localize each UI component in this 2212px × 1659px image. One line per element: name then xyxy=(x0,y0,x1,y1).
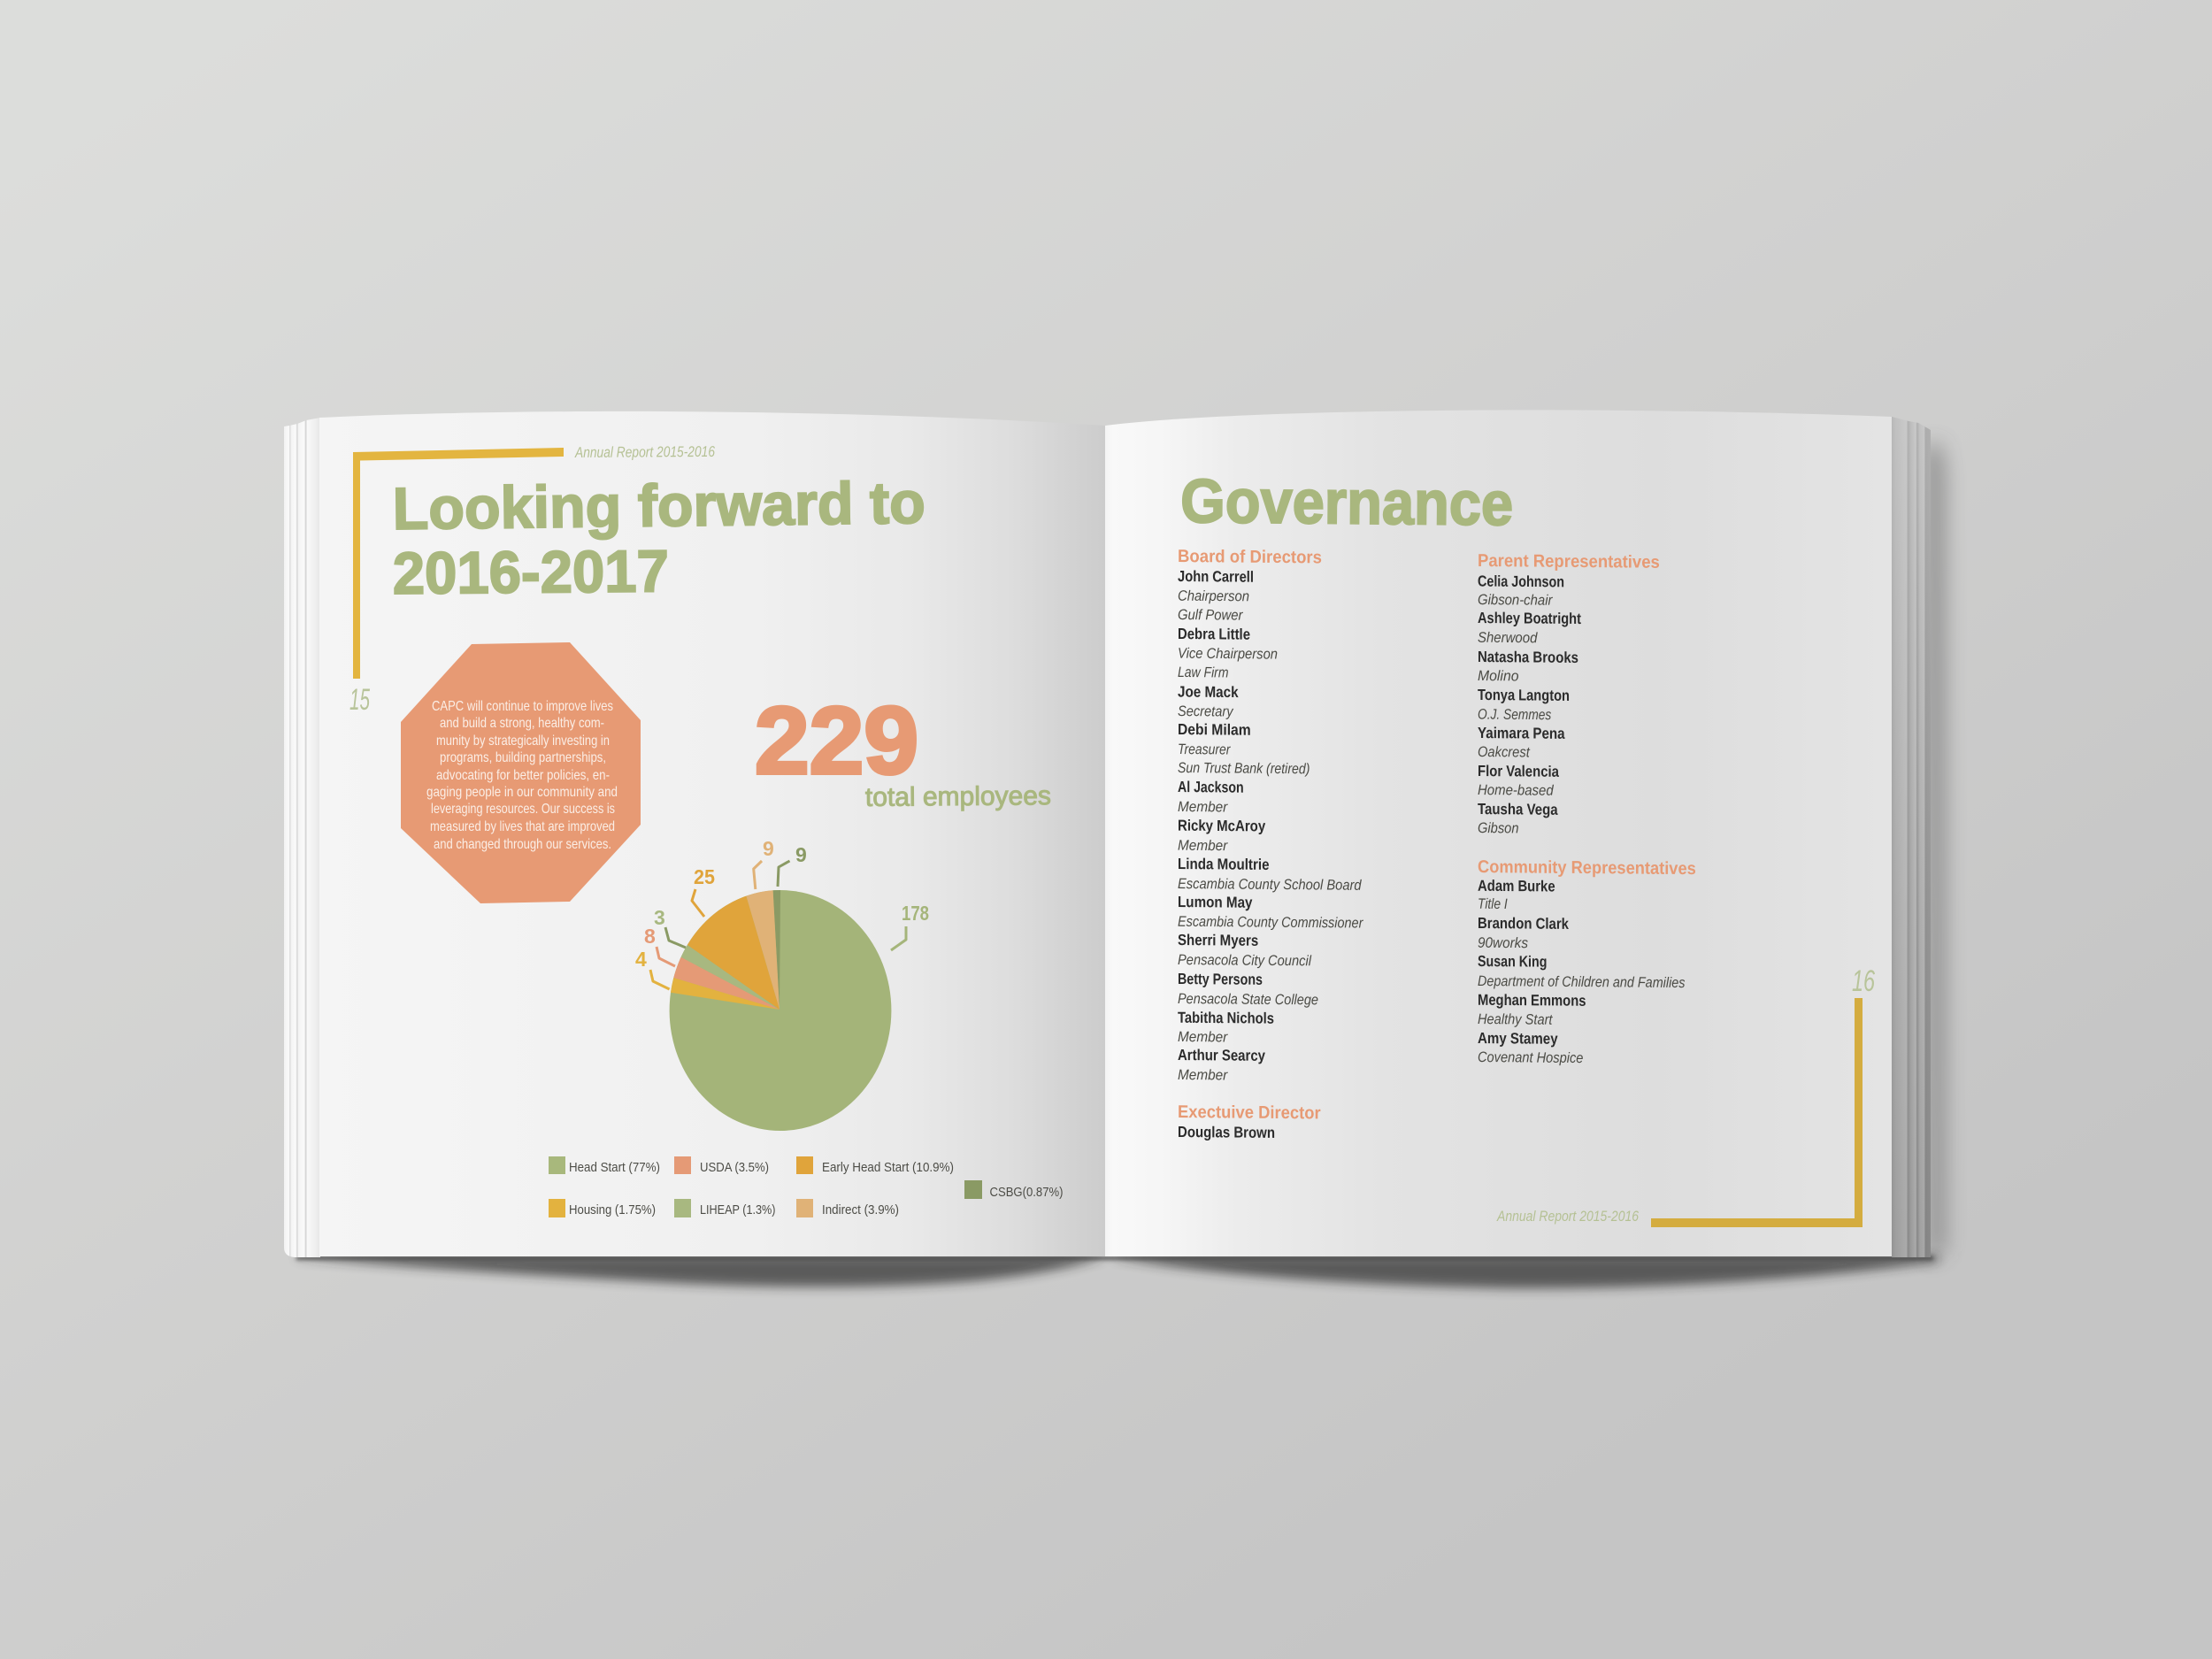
pie callout labels: 3 xyxy=(654,906,665,929)
right page stack edge xyxy=(1892,417,1931,1257)
right page sheet xyxy=(1105,410,1892,1256)
column: parent and community representatives: Brandon Clark xyxy=(1478,914,1569,933)
page number 15: 15 xyxy=(349,683,370,717)
column: parent and community representatives: Gibson xyxy=(1478,820,1518,836)
pie chart legend xyxy=(549,1156,1064,1217)
column: parent and community representatives: Susan King xyxy=(1478,952,1547,971)
column: board of directors and executive director: Ricky McAroy xyxy=(1178,817,1265,834)
callout: mission octagon: gaging people in our community and xyxy=(426,785,618,800)
column: board of directors and executive director: Linda Moultrie xyxy=(1178,855,1270,873)
column: parent and community representatives: Home-based xyxy=(1478,782,1554,799)
column: board of directors and executive director: Pensacola State College xyxy=(1178,991,1318,1008)
column: parent and community representatives: O.J. Semmes xyxy=(1478,707,1551,723)
column: board of directors and executive director: Member xyxy=(1178,1029,1229,1046)
callout: mission octagon: and changed through our services. xyxy=(434,837,611,852)
column: board of directors and executive director: Treasurer xyxy=(1178,741,1232,758)
right page corner bracket xyxy=(1651,998,1863,1227)
column: board of directors and executive director: Law Firm xyxy=(1178,664,1228,681)
column: board of directors and executive director: Gulf Power xyxy=(1178,607,1244,624)
column: parent and community representatives: Natasha Brooks xyxy=(1478,648,1578,666)
heading: Governance: Governance xyxy=(1180,466,1514,538)
running header left: Annual Report 2015-2016 xyxy=(574,443,715,461)
stat: 229 total employees xyxy=(755,687,1051,812)
column: parent and community representatives: Tausha Vega xyxy=(1478,800,1558,818)
callout: mission octagon: leveraging resources. Our success is xyxy=(431,802,615,817)
left page corner bracket xyxy=(353,448,564,679)
pie callout labels xyxy=(635,837,929,989)
callout: mission octagon xyxy=(401,642,641,903)
column: board of directors and executive director: Douglas Brown xyxy=(1178,1123,1275,1141)
pie chart: employees by program xyxy=(670,890,891,1131)
callout: mission octagon: advocating for better policies, en- xyxy=(436,768,610,783)
pie callout labels: 9 xyxy=(795,843,807,866)
column: board of directors and executive director: Al Jackson xyxy=(1178,778,1244,796)
column: board of directors and executive director: Vice Chairperson xyxy=(1178,646,1278,663)
column: parent and community representatives: Community Representatives xyxy=(1478,857,1696,879)
pie chart legend: Head Start (77%) xyxy=(569,1160,660,1175)
callout: mission octagon: and build a strong, healthy com- xyxy=(440,716,604,731)
callout: mission octagon: CAPC will continue to improve lives xyxy=(432,699,613,714)
column: board of directors and executive director: Secretary xyxy=(1178,703,1234,720)
column: parent and community representatives: Title I xyxy=(1478,896,1508,912)
pie chart legend: Housing (1.75%) xyxy=(569,1202,656,1217)
page number 16: 16 xyxy=(1852,964,1875,998)
running footer right: Annual Report 2015-2016 xyxy=(1496,1208,1639,1225)
column: board of directors and executive director: Sherri Myers xyxy=(1178,931,1258,949)
stat: 229 total employees: 229 xyxy=(755,687,918,794)
column: parent and community representatives: Department of Children and Families xyxy=(1478,973,1686,991)
shadow under the book xyxy=(296,442,1945,1288)
pie chart legend: Early Head Start (10.9%) xyxy=(822,1160,954,1175)
column: parent and community representatives: Gibson-chair xyxy=(1478,592,1554,609)
column: board of directors and executive director: Member xyxy=(1178,799,1229,816)
column: board of directors and executive director: Member xyxy=(1178,1067,1229,1084)
pie callout labels: 8 xyxy=(644,925,656,948)
pie chart legend: LIHEAP (1.3%) xyxy=(700,1202,776,1217)
column: board of directors and executive director: Member xyxy=(1178,838,1229,854)
panel: left page xyxy=(319,411,1106,1256)
column: board of directors and executive director: Chairperson xyxy=(1178,588,1249,604)
callout: mission octagon: programs, building partnerships, xyxy=(440,750,606,765)
pie callout labels: 25 xyxy=(694,865,715,888)
column: parent and community representatives: Healthy Start xyxy=(1478,1011,1554,1028)
column: parent and community representatives: Amy Stamey xyxy=(1478,1029,1558,1048)
column: parent and community representatives xyxy=(1478,551,1696,1067)
column: board of directors and executive director: Debra Little xyxy=(1178,625,1250,643)
column: parent and community representatives: Meghan Emmons xyxy=(1478,991,1586,1010)
column: board of directors and executive director xyxy=(1178,547,1364,1142)
panel: right page xyxy=(1105,410,1892,1256)
column: board of directors and executive director: Betty Persons xyxy=(1178,970,1263,988)
heading: Looking forward to 2016-2017: 2016-2017 xyxy=(392,538,669,607)
column: board of directors and executive director: Lumon May xyxy=(1178,893,1253,911)
column: parent and community representatives: Ashley Boatright xyxy=(1478,609,1581,627)
column: board of directors and executive director: Escambia County School Board xyxy=(1178,876,1362,894)
pie callout labels: 4 xyxy=(635,948,647,971)
column: parent and community representatives: Molino xyxy=(1478,668,1518,684)
column: board of directors and executive director: Exectuive Director xyxy=(1178,1102,1321,1123)
heading: Looking forward to 2016-2017: Looking forward to xyxy=(392,470,926,542)
column: parent and community representatives: Covenant Hospice xyxy=(1478,1049,1583,1066)
pie chart legend: Indirect (3.9%) xyxy=(822,1202,899,1217)
column: board of directors and executive director: Escambia County Commissioner xyxy=(1178,914,1364,932)
column: parent and community representatives: Sherwood xyxy=(1478,630,1538,646)
column: parent and community representatives: Adam Burke xyxy=(1478,877,1555,895)
column: board of directors and executive director: Debi Milam xyxy=(1178,720,1251,739)
column: board of directors and executive director: John Carrell xyxy=(1178,567,1254,586)
column: parent and community representatives: Tonya Langton xyxy=(1478,686,1570,704)
column: board of directors and executive director: Sun Trust Bank (retired) xyxy=(1178,760,1310,777)
pie chart legend: CSBG(0.87%) xyxy=(989,1185,1064,1200)
pie callout labels: 9 xyxy=(763,837,774,860)
column: board of directors and executive director: Arthur Searcy xyxy=(1178,1046,1265,1064)
left page stack edge xyxy=(284,418,320,1257)
column: board of directors and executive director: Pensacola City Council xyxy=(1178,952,1312,969)
column: parent and community representatives: Yaimara Pena xyxy=(1478,724,1565,742)
callout: mission octagon: munity by strategically investing in xyxy=(436,733,610,749)
column: board of directors and executive director: Joe Mack xyxy=(1178,683,1239,701)
column: board of directors and executive director: Board of Directors xyxy=(1178,547,1322,567)
column: parent and community representatives: Parent Representatives xyxy=(1478,551,1660,572)
column: parent and community representatives: Celia Johnson xyxy=(1478,572,1564,590)
column: parent and community representatives: Flor Valencia xyxy=(1478,762,1559,780)
column: parent and community representatives: Oakcrest xyxy=(1478,744,1531,761)
callout: mission octagon: measured by lives that are improved xyxy=(430,819,615,834)
pie callout labels: 178 xyxy=(902,902,929,925)
column: board of directors and executive director: Tabitha Nichols xyxy=(1178,1009,1274,1027)
pie chart legend: USDA (3.5%) xyxy=(700,1160,769,1175)
left page sheet xyxy=(319,411,1106,1256)
heading: Looking forward to 2016-2017 xyxy=(392,470,926,607)
stat: 229 total employees: total employees xyxy=(865,781,1051,812)
column: parent and community representatives: 90works xyxy=(1478,935,1528,951)
